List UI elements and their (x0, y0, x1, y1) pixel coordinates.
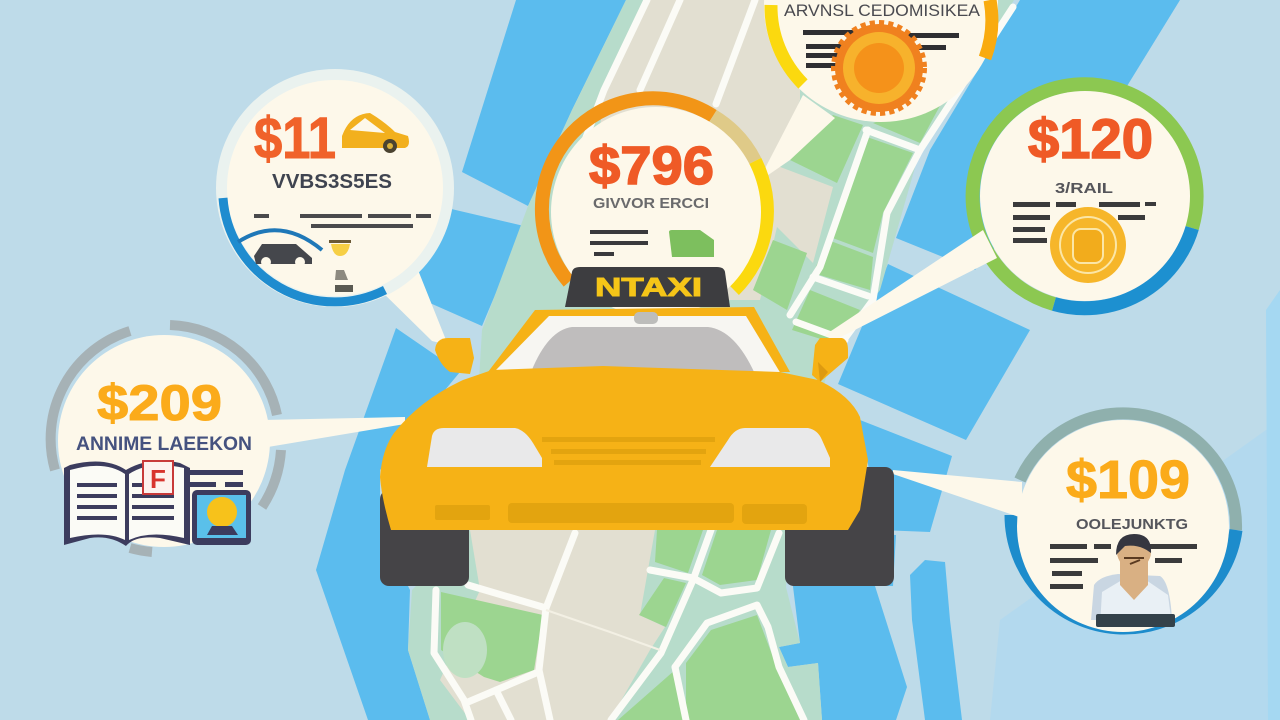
land base (408, 0, 1014, 720)
windshield (494, 316, 781, 374)
ring: grey segments (51, 325, 281, 552)
mirrors (435, 338, 474, 374)
grille (542, 437, 715, 465)
ring: blue arc (1011, 515, 1236, 628)
taxi car (380, 267, 894, 586)
callout: left $209 (51, 325, 405, 552)
icon: sun (835, 24, 923, 112)
beige blocks (440, 0, 833, 720)
bumper (435, 503, 807, 524)
icon: badge photo (192, 490, 251, 545)
map: central island (408, 0, 1014, 720)
green blocks (441, 100, 943, 720)
icon: open book: F (150, 464, 166, 494)
callout: top left $11 vehicle (216, 69, 454, 345)
pale park (443, 622, 487, 678)
text lines (1050, 544, 1197, 589)
icon: small taxi (342, 113, 409, 153)
icon: green ticket (669, 230, 714, 257)
wheels (380, 490, 469, 586)
ring: blue arc (223, 198, 385, 302)
icon: coin (1050, 207, 1126, 283)
icon: car emblem (238, 230, 322, 267)
water: blue blocks (316, 0, 1180, 720)
ring: blue arc (1054, 228, 1192, 308)
roof sign (565, 267, 730, 307)
cabin roof (488, 307, 790, 372)
callout: right $120 (825, 84, 1197, 340)
roof sign: NTAXI (595, 272, 702, 302)
ring: pale arc (713, 116, 755, 161)
price: $11 (254, 106, 336, 171)
ring: green arc (973, 84, 1197, 304)
callout: bottom right $109 (893, 413, 1236, 632)
callout: centre $796 (542, 98, 767, 317)
price: $109 (1066, 450, 1190, 510)
ring: orange arc (542, 98, 713, 282)
label: OOLEJUNKTG (1076, 516, 1188, 533)
text lines (590, 230, 648, 256)
label: ARVNSL CEDOMISIKEA (784, 1, 981, 20)
car body (380, 366, 868, 530)
label: 3/RAIL (1055, 180, 1113, 197)
callout: top sun cost (758, 0, 998, 182)
price: $120 (1028, 107, 1153, 170)
headlights (427, 428, 542, 467)
ring: grey arc (1020, 413, 1236, 530)
text lines (190, 470, 243, 487)
ring: yellow arc (734, 161, 767, 290)
price: $796 (589, 136, 714, 196)
white roads (434, 0, 1013, 720)
label: ANNIME LAEEKON (76, 434, 252, 455)
text lines (1013, 202, 1156, 243)
icon: cone (329, 240, 353, 292)
ring: orange arc (985, 0, 992, 58)
icon: open book (64, 461, 190, 546)
text lines (254, 214, 431, 228)
label: VVBS3S5ES (272, 171, 392, 193)
text lines (803, 30, 959, 68)
ring: yellow arc (771, 5, 803, 84)
icon: person at desk (1091, 534, 1175, 627)
label: GIVVOR ERCCI (593, 195, 709, 212)
price: $209 (97, 375, 222, 431)
